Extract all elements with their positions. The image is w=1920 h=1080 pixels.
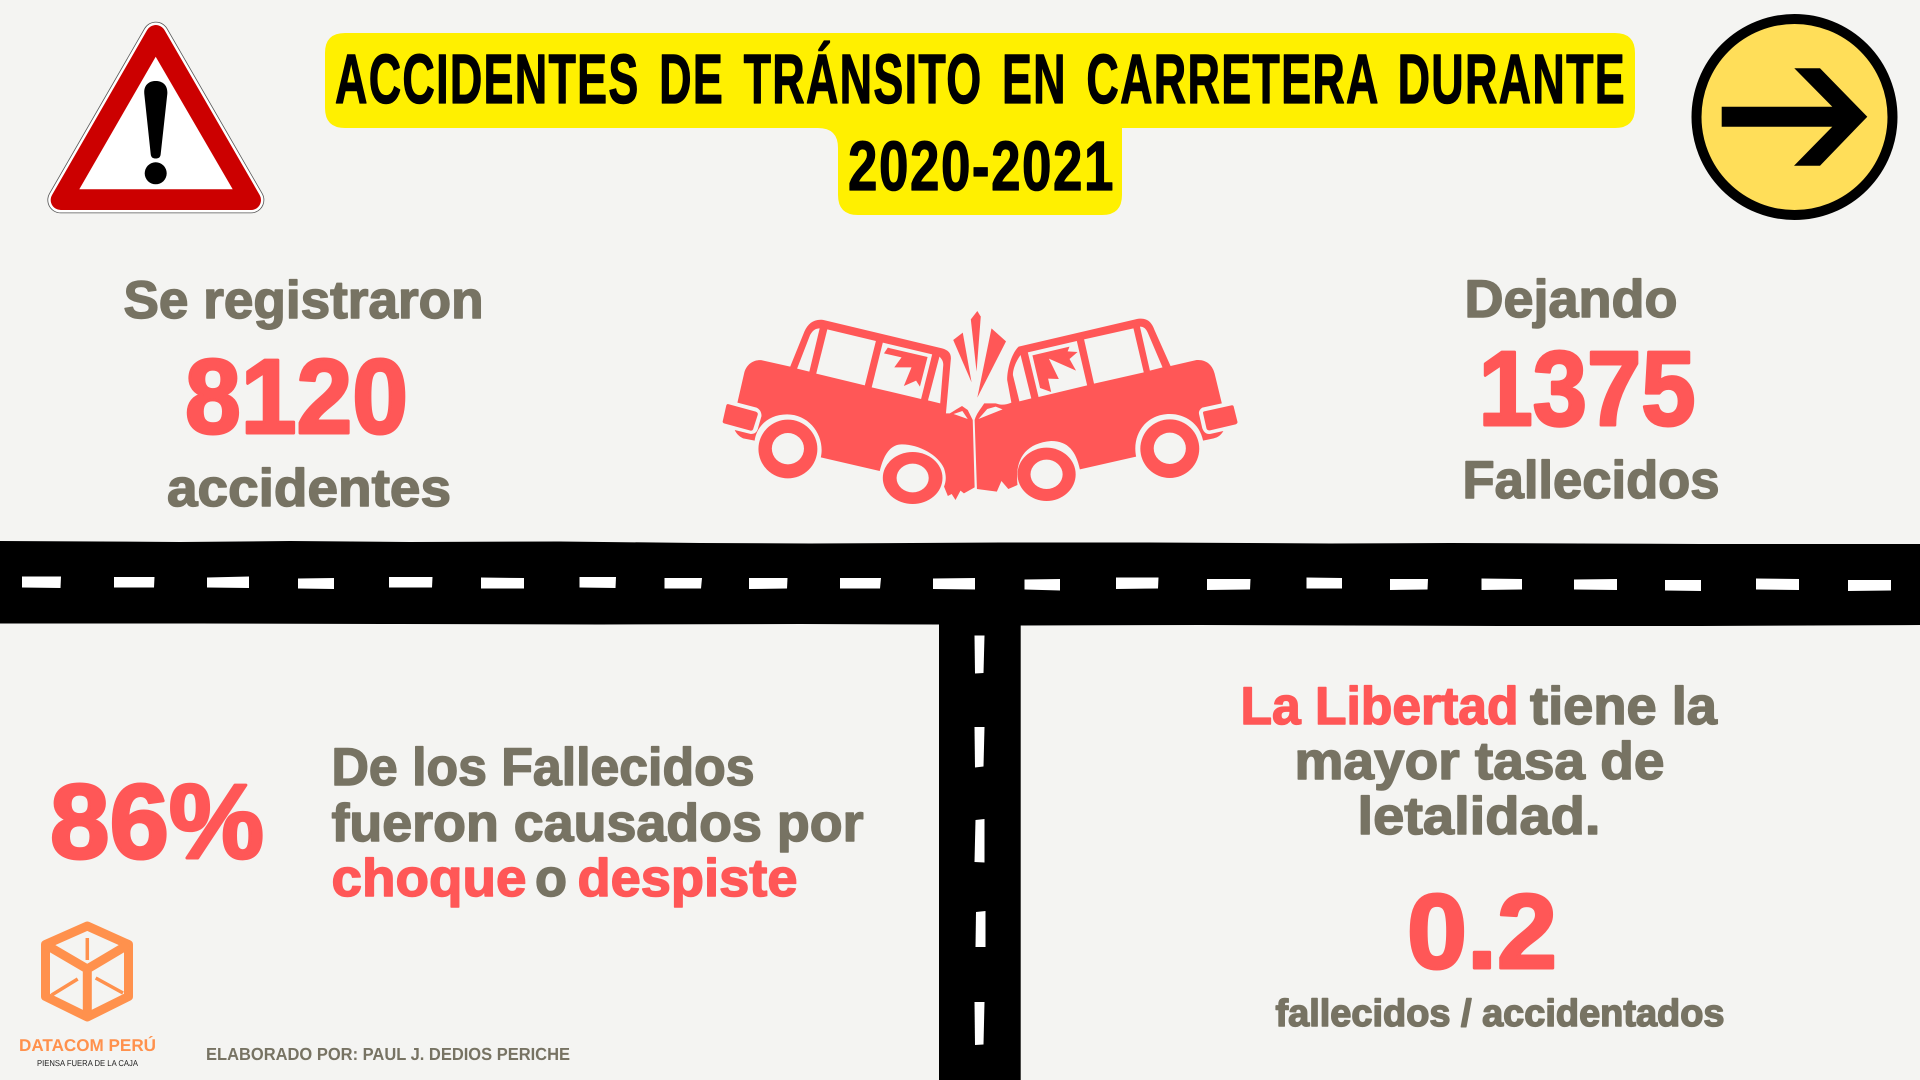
- impact shards: [953, 311, 1006, 398]
- description: choque: [332, 849, 526, 908]
- description: [1240, 677, 1718, 846]
- icon: orange cube: [46, 926, 128, 1017]
- stat: fatalities: [1462, 270, 1720, 510]
- icon: warning triangle: [61, 35, 251, 200]
- unit: Fallecidos: [1462, 451, 1720, 510]
- stat: accidents registered: [124, 271, 484, 518]
- credit: ELABORADO POR: PAUL J. DEDIOS PERICHE: [206, 1044, 570, 1064]
- vertical lane dashes: [974, 636, 986, 1045]
- road: T junction: [0, 541, 1920, 1080]
- text block: La Libertad: [1240, 677, 1724, 1035]
- unit: fallecidos / accidentados: [1276, 993, 1724, 1035]
- title line 2: 2020-2021: [848, 127, 1115, 205]
- horizontal lane dashes: [22, 576, 1891, 591]
- tagline: PIENSA FUERA DE LA CAJA: [37, 1058, 138, 1068]
- right car: [975, 319, 1238, 501]
- left car: [723, 320, 975, 504]
- description: despiste: [578, 849, 798, 908]
- number: 1375: [1478, 330, 1696, 448]
- big percentage: 86%: [50, 763, 264, 881]
- description: La Libertad: [1240, 677, 1518, 736]
- description: fueron causados por: [332, 794, 864, 853]
- number: 0.2: [1407, 873, 1557, 991]
- description: o: [535, 849, 567, 908]
- label: Dejando: [1464, 270, 1678, 329]
- icon: crashed cars: [723, 311, 1238, 504]
- label: Se registraron: [124, 271, 484, 330]
- title: [325, 33, 1635, 215]
- description: letalidad.: [1358, 787, 1600, 846]
- number: 8120: [185, 338, 408, 456]
- description: tiene la: [1530, 677, 1718, 736]
- title highlight: [325, 33, 1635, 215]
- unit: accidentes: [167, 459, 451, 518]
- logo: Datacom Perú: [19, 926, 156, 1068]
- description: De los Fallecidos: [332, 738, 754, 797]
- icon: arrow in yellow circle: [1696, 19, 1892, 215]
- description: mayor tasa de: [1294, 732, 1664, 791]
- logo name: DATACOM PERÚ: [19, 1035, 156, 1055]
- description: [332, 738, 864, 908]
- text block: 86 percent: [50, 738, 864, 908]
